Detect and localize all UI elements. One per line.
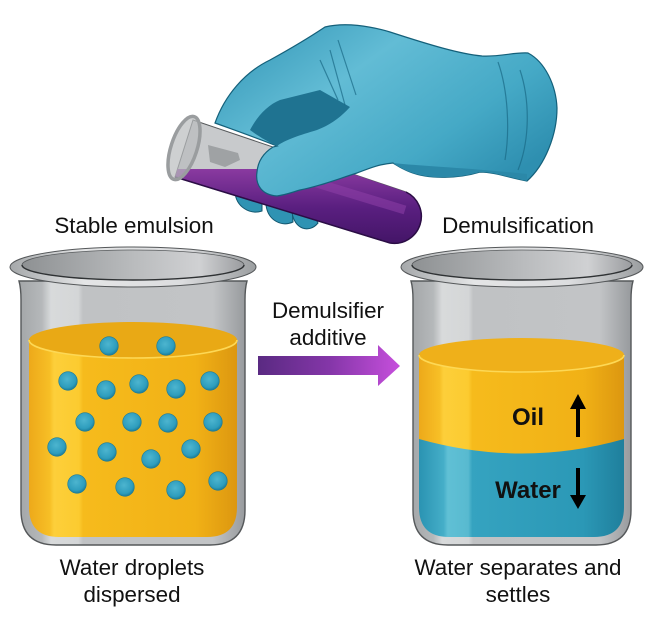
icon: fingers behind tube: [235, 192, 318, 229]
beaker rim: [401, 247, 643, 287]
beaker: stable emulsion: [10, 247, 256, 545]
tube label patch: [208, 145, 240, 167]
heading: demulsification: Demulsification: [442, 213, 594, 238]
glass body: [411, 281, 633, 545]
arrow: oil rises: [570, 394, 586, 437]
icon: test tube with purple liquid: [166, 114, 422, 244]
icon: gloved hand: [215, 25, 557, 196]
glass body: [19, 281, 247, 545]
beaker: demulsification: [401, 247, 643, 545]
beaker opening: [412, 250, 632, 280]
glove underside shadow: [393, 163, 527, 181]
oil fill: [29, 340, 237, 537]
heading: stable emulsion: Stable emulsion: [54, 213, 214, 238]
tube glass: [175, 120, 421, 243]
arrow: demulsifier addition: [258, 345, 400, 386]
opening front edge: [412, 265, 632, 280]
purple liquid: [176, 169, 421, 243]
water layer: [419, 438, 624, 537]
beaker opening: [22, 250, 244, 280]
caption: water separates and settles: settles: [486, 582, 550, 607]
label: demulsifier additive: additive: [289, 325, 367, 350]
label: demulsifier additive: Demulsifier: [272, 298, 384, 323]
beaker rim: [10, 247, 256, 287]
caption: water droplets dispersed: Water droplets: [60, 555, 204, 580]
oil layer: [419, 355, 624, 454]
arrow: water settles: [570, 468, 586, 509]
oil surface highlight: [419, 355, 624, 372]
glove body: [215, 25, 557, 196]
caption: water separates and settles: Water separates and: [414, 555, 622, 580]
oil surface: [29, 322, 237, 358]
droplets: [48, 337, 227, 499]
palm shadow: [250, 90, 350, 146]
liquid highlight: [300, 178, 405, 210]
oil surface highlight: [29, 340, 237, 358]
opening front edge: [22, 265, 244, 280]
label: water: Water: [495, 477, 561, 504]
tube rim: [161, 113, 207, 183]
tube outer edge: [175, 177, 421, 243]
glove creases: [320, 40, 527, 170]
label: oil: Oil: [512, 404, 544, 431]
oil surface: [419, 338, 624, 372]
caption: water droplets dispersed: dispersed: [83, 582, 181, 607]
